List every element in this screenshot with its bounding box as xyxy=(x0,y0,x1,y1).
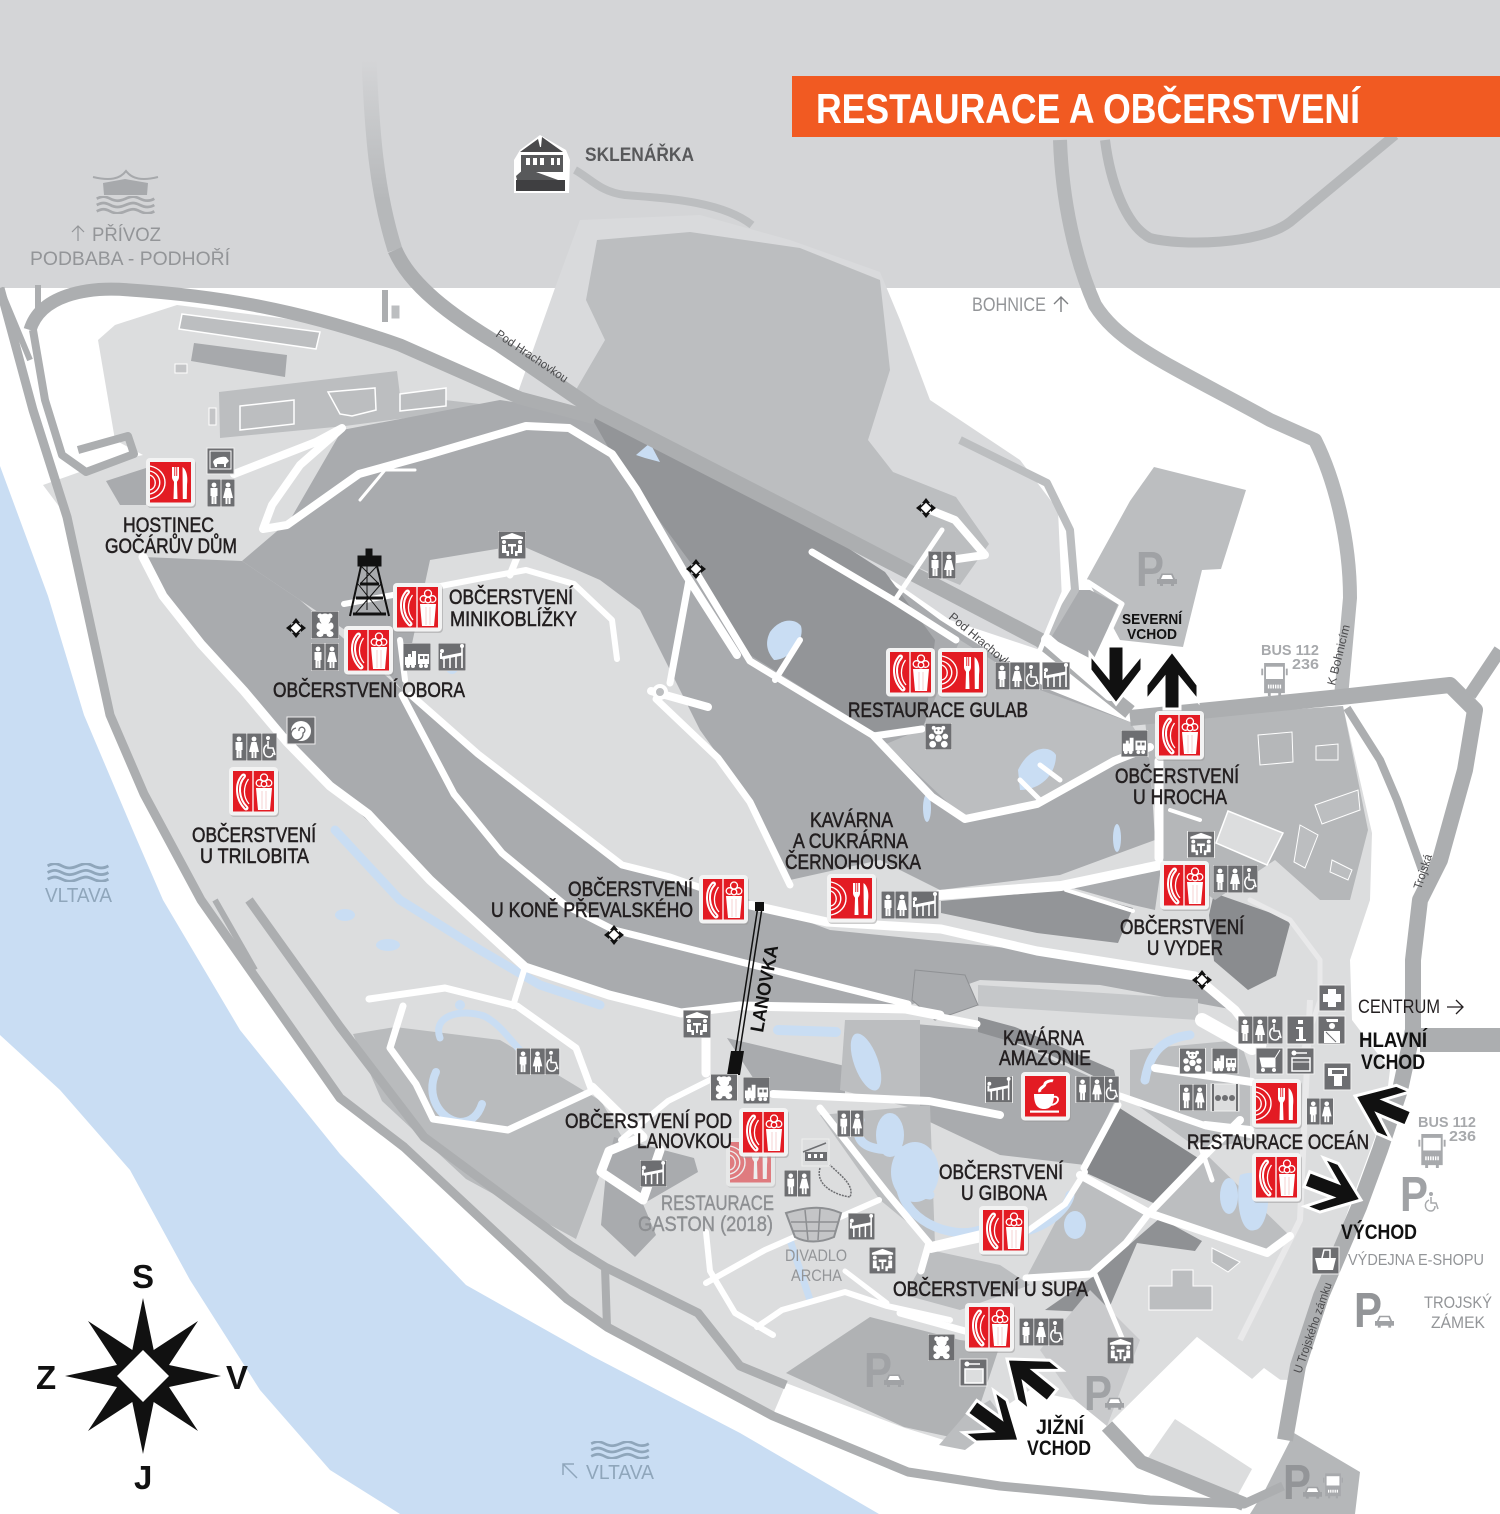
icon: lockers key south xyxy=(960,1359,987,1386)
icon: občerstvení U Supa xyxy=(965,1303,1015,1353)
icon: restaurace Gastón xyxy=(726,1138,776,1188)
road names xyxy=(493,327,1435,1375)
roundabout xyxy=(654,686,666,698)
label: Restaurace Gulab: RESTAURACE GULAB xyxy=(848,699,1028,722)
icon: lockers key xyxy=(1287,1048,1314,1074)
compass rose xyxy=(36,1258,248,1496)
area: northern band outside the zoo xyxy=(0,0,1500,288)
label: Kavárna a cukrárna Černohouska xyxy=(785,809,921,874)
river Vltava xyxy=(0,466,879,1514)
compass rose: Z xyxy=(36,1359,56,1396)
label: Sklenářka: SKLENÁŘKA xyxy=(585,144,694,166)
bus stop east xyxy=(1418,1114,1476,1168)
label: Vltava west xyxy=(45,864,113,907)
label: Občerstvení Minikoblížky xyxy=(449,586,577,631)
label: Jižní vchod: VCHOD xyxy=(1027,1437,1091,1460)
bus stop north xyxy=(1261,642,1319,696)
bus stop east: BUS 112 xyxy=(1418,1114,1476,1131)
service icons: zoo train xyxy=(403,643,1238,1104)
park land silhouette xyxy=(43,305,1390,1445)
label: Kavárna Amazonie: KAVÁRNA xyxy=(1003,1027,1084,1050)
label: Občerstvení U Vyder: U VYDER xyxy=(1147,937,1223,960)
small terrain under Hostinec xyxy=(106,468,146,505)
icon: Sklenářka house xyxy=(514,135,570,193)
icon: trilobite shell xyxy=(287,717,315,744)
label: Kavárna a cukrárna Černohouska: KAVÁRNA xyxy=(810,809,893,832)
water features xyxy=(335,443,1268,1300)
icon: ticket office xyxy=(1324,1063,1351,1090)
entrance arrow: east xyxy=(1298,1155,1370,1224)
label: Hlavní vchod: HLAVNÍ xyxy=(1359,1029,1428,1052)
label: Bohnice: BOHNICE xyxy=(972,295,1046,316)
lighter terrain by the pond xyxy=(886,640,1148,819)
label: Divadlo Archa: ARCHA xyxy=(791,1266,843,1285)
label: Východ: VÝCHOD xyxy=(1341,1220,1417,1244)
label: Občerstvení pod lanovkou: OBČERSTVENÍ POD xyxy=(565,1110,732,1133)
icon: občerstvení Obora xyxy=(344,626,394,676)
entrance arrow: south out xyxy=(957,1386,1034,1462)
southern dark terrain band xyxy=(143,557,1235,1013)
bus stop north: BUS 112 xyxy=(1261,642,1319,659)
bus stop north: 236 xyxy=(1292,656,1319,673)
white wedge parking side xyxy=(774,1384,903,1445)
label: Trojský zámek: ZÁMEK xyxy=(1431,1313,1486,1332)
parking lots xyxy=(786,467,1360,1514)
label: Restaurace Gastón 2018: RESTAURACE xyxy=(661,1192,774,1215)
entrance arrow: north out xyxy=(1090,646,1142,704)
label: Kavárna a cukrárna Černohouska: A CUKRÁRNA xyxy=(793,830,908,853)
label: Přívoz xyxy=(30,224,231,270)
label: Hlavní vchod xyxy=(1359,1029,1428,1074)
icon: občerstvení Gulab xyxy=(886,648,936,698)
road names: K Bohnicím xyxy=(1324,623,1353,687)
north-west service buildings xyxy=(175,314,498,438)
parking: south west lot: P xyxy=(864,1344,892,1398)
cable car xyxy=(727,902,783,1075)
main ridge dark terrain xyxy=(242,400,1155,890)
service icons: petting zoo bears xyxy=(311,611,1206,1361)
icon: občerstvení Oceán xyxy=(1252,1153,1302,1203)
eastern dark terrain xyxy=(941,706,1368,990)
entrance arrow: main xyxy=(1345,1072,1419,1143)
road names: Pod Hrachovkou xyxy=(493,327,571,385)
icon: information xyxy=(1287,1016,1314,1044)
compass rose: V xyxy=(226,1359,248,1396)
icon: e-shop basket xyxy=(1312,1247,1339,1274)
parking: bottom with bus xyxy=(1283,1456,1343,1510)
icon: restaurace Gulab xyxy=(938,648,988,698)
road names: Pod Hrachovkou xyxy=(946,610,1024,678)
label: Kavárna Amazonie xyxy=(999,1027,1091,1070)
icon: občerstvení Minikoblížky xyxy=(393,583,443,633)
label: Jižní vchod xyxy=(1027,1415,1091,1460)
trail railway loop xyxy=(819,1165,851,1197)
service icons: accessible toilets xyxy=(232,662,1283,1346)
label: Restaurace Oceán: RESTAURACE OCEÁN xyxy=(1187,1131,1369,1154)
label: Severní vchod: VCHOD xyxy=(1127,626,1177,643)
label: Občerstvení U koně Převalského: OBČERSTVENÍ xyxy=(568,878,693,901)
label: Občerstvení U Trilobita: U TRILOBITA xyxy=(200,845,309,868)
darker ridge north-east of the loop path xyxy=(590,415,935,732)
label: Hlavní vchod: VCHOD xyxy=(1361,1051,1425,1074)
service icons: picnic shelters xyxy=(498,531,1214,1364)
icon: first aid xyxy=(1319,985,1345,1011)
label: Kavárna Amazonie: AMAZONIE xyxy=(999,1047,1091,1070)
label: Kavárna a cukrárna Černohouska: ČERNOHOUSKA xyxy=(785,851,921,874)
icon: ferry xyxy=(93,171,158,213)
label: Vltava south xyxy=(563,1442,655,1484)
title banner xyxy=(792,76,1500,137)
entrance arrow: north in xyxy=(1146,651,1198,709)
entrance arrow: south in xyxy=(991,1339,1068,1416)
label: Občerstvení U Hrocha: U HROCHA xyxy=(1133,786,1227,809)
building blocks south east xyxy=(1149,1248,1240,1310)
icon: kavárna Amazonie xyxy=(1021,1072,1071,1122)
icon: občerstvení Pod Lanovkou xyxy=(739,1108,789,1158)
icon: aquarium xyxy=(1211,1084,1239,1111)
title banner: RESTAURACE A OBČERSTVENÍ xyxy=(816,84,1361,132)
label: Občerstvení U Vyder: OBČERSTVENÍ xyxy=(1120,916,1244,939)
icon: občerstvení U Trilobita xyxy=(229,767,279,817)
light block bottom xyxy=(1145,1419,1252,1500)
white land block south east xyxy=(1107,1337,1294,1469)
service icons: toilets xyxy=(207,479,1334,1197)
label: Jižní vchod: JIŽNÍ xyxy=(1036,1415,1085,1439)
white footpaths xyxy=(143,426,1320,1338)
label: Přívoz: PODBABA - PODHOŘÍ xyxy=(30,248,231,270)
label: Restaurace Gastón 2018: GASTON (2018) xyxy=(638,1213,773,1236)
label: Severní vchod: SEVERNÍ xyxy=(1122,611,1183,628)
label: Občerstvení U Supa: OBČERSTVENÍ U SUPA xyxy=(893,1278,1088,1301)
label: Občerstvení U koně Převalského xyxy=(491,878,693,922)
parking: east: P xyxy=(1354,1284,1382,1338)
icon: pavilion gallery xyxy=(207,448,234,474)
label: Trojský zámek xyxy=(1424,1293,1492,1332)
parking: accessible: P xyxy=(1400,1168,1428,1222)
label: Občerstvení U Trilobita: OBČERSTVENÍ xyxy=(192,824,316,847)
parking: bottom with bus: P xyxy=(1283,1456,1311,1510)
label: Výdejna e-shopu: VÝDEJNA E-SHOPU xyxy=(1348,1250,1484,1269)
icon: občerstvení U Hrocha xyxy=(1155,711,1205,761)
label: Občerstvení U Hrocha xyxy=(1115,765,1239,809)
cable car: LANOVKA xyxy=(747,943,783,1034)
label: Občerstvení U Gibona: U GIBONA xyxy=(961,1182,1047,1205)
label: Občerstvení U Gibona xyxy=(939,1161,1063,1205)
compass rose: S xyxy=(132,1258,154,1295)
label: Vltava west: VLTAVA xyxy=(45,885,113,907)
label: Občerstvení Minikoblížky: OBČERSTVENÍ xyxy=(449,586,573,609)
label: Restaurace Gastón 2018 xyxy=(638,1192,774,1236)
icon: kavárna Černohouska xyxy=(827,874,877,924)
icon: občerstvení U Gibona xyxy=(979,1206,1029,1256)
label: Občerstvení U Hrocha: OBČERSTVENÍ xyxy=(1115,765,1239,788)
hill north of the zoo xyxy=(517,215,1062,650)
label: Divadlo Archa xyxy=(785,1246,847,1285)
label: Severní vchod xyxy=(1122,611,1183,643)
label: Občerstvení U koně Převalského: U KONĚ PŘEVALSKÉHO xyxy=(491,899,693,922)
road narrow stub Sklenarka top xyxy=(391,305,400,319)
south-west lower zoo terrain xyxy=(353,1027,698,1257)
icon: restaurace Oceán xyxy=(1252,1079,1302,1129)
label: Občerstvení pod lanovkou xyxy=(565,1110,732,1153)
parking: north: P xyxy=(1136,543,1164,597)
label: Centrum: CENTRUM xyxy=(1358,997,1440,1018)
icon: funicular xyxy=(802,1139,829,1166)
icon: guard xyxy=(1318,1016,1345,1044)
icon: občerstvení U Vyder xyxy=(1160,861,1210,911)
label: Hostinec Gočárův dům xyxy=(105,514,237,558)
label: Občerstvení U Vyder xyxy=(1120,916,1244,960)
label: Občerstvení U Gibona: OBČERSTVENÍ xyxy=(939,1161,1063,1184)
service icons: playgrounds xyxy=(438,643,1070,1240)
icon: theatre Archa xyxy=(786,1208,841,1242)
south central terrain xyxy=(727,970,1290,1313)
icon: občerstvení U Koně xyxy=(699,875,749,925)
icon: lookout tower xyxy=(350,549,389,616)
label: Hostinec Gočárův dům: GOČÁRŮV DŮM xyxy=(105,534,237,558)
bus stop east: 236 xyxy=(1449,1128,1476,1145)
label: Hostinec Gočárův dům: HOSTINEC xyxy=(123,514,214,537)
icon: restaurace Hostinec xyxy=(146,458,196,508)
label: Divadlo Archa: DIVADLO xyxy=(785,1246,847,1265)
compass rose: J xyxy=(134,1459,152,1496)
south entrance buildings xyxy=(939,1400,1005,1450)
label: Občerstvení U Trilobita xyxy=(192,824,316,868)
label: Vltava south: VLTAVA xyxy=(586,1462,655,1484)
label: Občerstvení Minikoblížky: MINIKOBLÍŽKY xyxy=(450,608,577,631)
markers: waymark points xyxy=(286,498,1212,990)
road names: U Trojského zámku xyxy=(1291,1281,1335,1375)
label: Přívoz: PŘÍVOZ xyxy=(92,224,161,246)
parking: south lot: P xyxy=(1084,1367,1112,1421)
label: Občerstvení Obora: OBČERSTVENÍ OBORA xyxy=(273,679,465,702)
label: Občerstvení pod lanovkou: LANOVKOU xyxy=(637,1130,732,1153)
road names: Trojská xyxy=(1411,852,1435,891)
icon: stroller rental xyxy=(1256,1048,1283,1074)
